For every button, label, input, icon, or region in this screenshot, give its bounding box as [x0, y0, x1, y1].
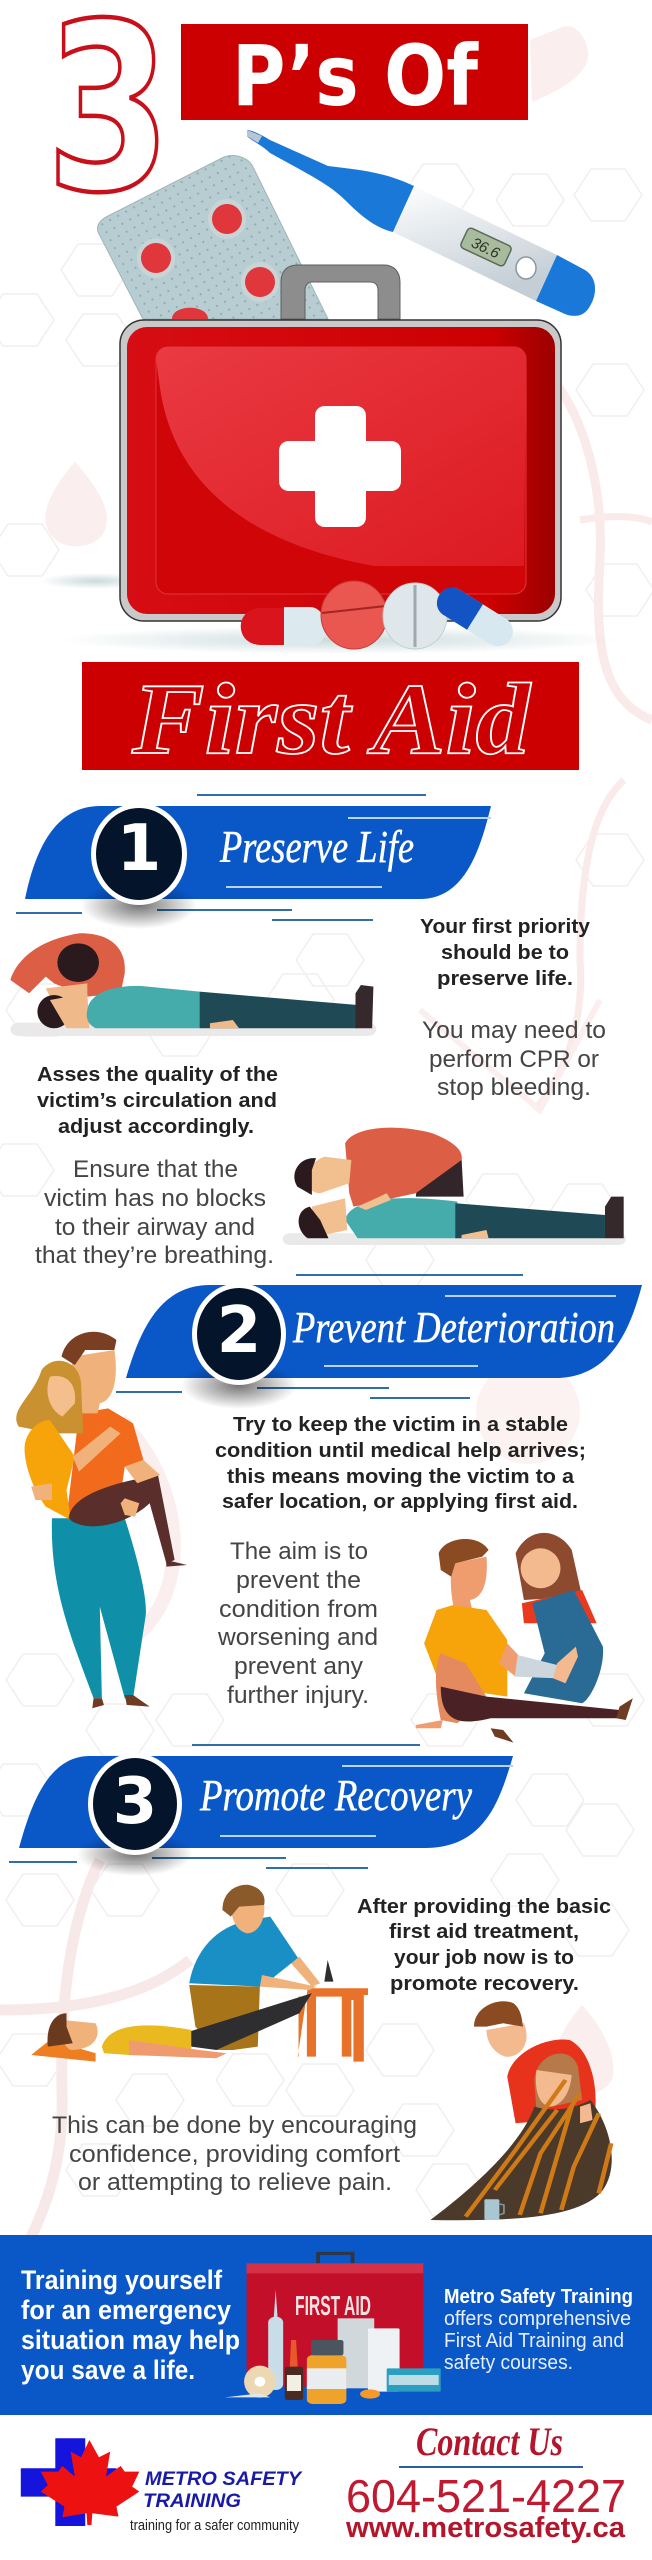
section 1 header	[16, 795, 491, 929]
text: CPR: perform CPR or	[429, 1046, 599, 1073]
text: assess circulation	[37, 1064, 278, 1138]
text: ensure airway: to their airway and	[55, 1214, 255, 1241]
text: training yourself: Training yourself	[21, 2265, 223, 2295]
contact block	[345, 2419, 626, 2544]
text: encouraging confidence: or attempting to relieve pain.	[78, 2169, 392, 2196]
text: the aim: prevent the	[236, 1567, 361, 1594]
text: training yourself: situation may help	[21, 2325, 240, 2355]
section 3 header: Promote Recovery	[199, 1771, 472, 1820]
text: first priority: Your first priority	[420, 916, 591, 938]
text: after first aid	[357, 1896, 611, 1995]
text: training yourself: for an emergency	[21, 2295, 231, 2325]
text: metro safety training offer: safety courses.	[444, 2352, 573, 2374]
illustration: bandaging arm	[416, 1533, 633, 1743]
text: assess circulation: adjust accordingly.	[58, 1116, 254, 1138]
icon: blister pack	[97, 156, 328, 319]
section 1 header: 1	[117, 812, 161, 886]
logo: metro safety training: TRAINING	[143, 2491, 241, 2512]
text: the aim: further injury.	[227, 1682, 369, 1709]
text: stable condition: safer location, or applying first aid.	[222, 1491, 578, 1513]
text: after first aid: your job now is to	[394, 1947, 574, 1969]
illustration: elevating leg	[31, 1885, 368, 2062]
logo: metro safety training	[21, 2438, 303, 2534]
text: after first aid: first aid treatment,	[389, 1921, 579, 1943]
illustration: mouth-to-mouth	[10, 933, 376, 1036]
text: stable condition: this means moving the victim to a	[227, 1466, 575, 1488]
text: the aim: prevent any	[234, 1653, 363, 1680]
text: after first aid: After providing the basic	[357, 1896, 611, 1918]
section 1 header: Preserve Life	[219, 821, 414, 872]
text: assess circulation: Asses the quality of the	[37, 1064, 278, 1086]
icon: thermometer: 36.6	[469, 234, 503, 263]
icon: white cross	[279, 406, 401, 527]
footer panel	[0, 2235, 652, 2415]
text: the aim: worsening and	[217, 1624, 378, 1651]
text: first priority: preserve life.	[437, 968, 573, 990]
text: first priority: should be to	[441, 942, 569, 964]
illustration: chest compressions	[283, 1128, 626, 1245]
text: encouraging confidence	[52, 2112, 417, 2196]
section 3 header	[9, 1753, 513, 1876]
text: CPR: stop bleeding.	[437, 1074, 591, 1101]
text: metro safety training offer: offers comprehensive	[444, 2308, 631, 2330]
text: training yourself	[21, 2265, 240, 2385]
text: the aim: condition from	[219, 1596, 378, 1623]
text: after first aid: promote recovery.	[390, 1973, 579, 1995]
contact block: 604-521-4227	[346, 2470, 626, 2522]
section 2 header	[116, 1283, 642, 1409]
text: ensure airway: victim has no blocks	[44, 1185, 266, 1212]
text: CPR: You may need to	[422, 1017, 606, 1044]
section 2 header: 2	[217, 1294, 261, 1368]
logo: metro safety training: training for a safer community	[130, 2517, 299, 2534]
text: ensure airway	[35, 1156, 274, 1269]
illustration: first aid kit	[225, 2253, 441, 2404]
text: ensure airway: Ensure that the	[73, 1156, 238, 1183]
icon: pills	[241, 581, 519, 652]
icon: thermometer	[247, 130, 595, 316]
text: metro safety training offer: Metro Safety Training	[444, 2286, 633, 2308]
text: metro safety training offer	[444, 2286, 633, 2374]
illustration: comforting with blanket	[430, 2001, 612, 2220]
text: stable condition	[215, 1414, 586, 1513]
text: CPR	[422, 1017, 606, 1101]
text: first priority	[420, 916, 591, 990]
title banner: First Aid: First Aid	[131, 663, 532, 776]
icon: first aid case	[40, 265, 620, 654]
title banner: P's Of: P’s Of	[232, 27, 479, 125]
text: the aim	[217, 1538, 378, 1709]
text: the aim: The aim is to	[230, 1538, 368, 1565]
logo: metro safety training: METRO SAFETY	[145, 2469, 303, 2490]
illustration: man carrying woman	[16, 1332, 187, 1708]
text: encouraging confidence: confidence, providing comfort	[69, 2141, 400, 2168]
section 3 header: 3	[113, 1765, 157, 1839]
text: assess circulation: victim’s circulation and	[37, 1090, 277, 1112]
text: ensure airway: that they’re breathing.	[35, 1242, 274, 1269]
illustration: first aid kit: FIRST AID	[295, 2290, 371, 2321]
text: encouraging confidence: This can be done by encouraging	[52, 2112, 417, 2139]
text: training yourself: you save a life.	[21, 2355, 195, 2385]
text: stable condition: condition until medical help arrives;	[215, 1440, 586, 1462]
contact block: Contact Us	[416, 2419, 563, 2464]
text: stable condition: Try to keep the victim in a stable	[233, 1414, 568, 1436]
text: metro safety training offer: First Aid Training and	[444, 2330, 624, 2352]
contact block: www.metrosafety.ca	[345, 2512, 626, 2544]
